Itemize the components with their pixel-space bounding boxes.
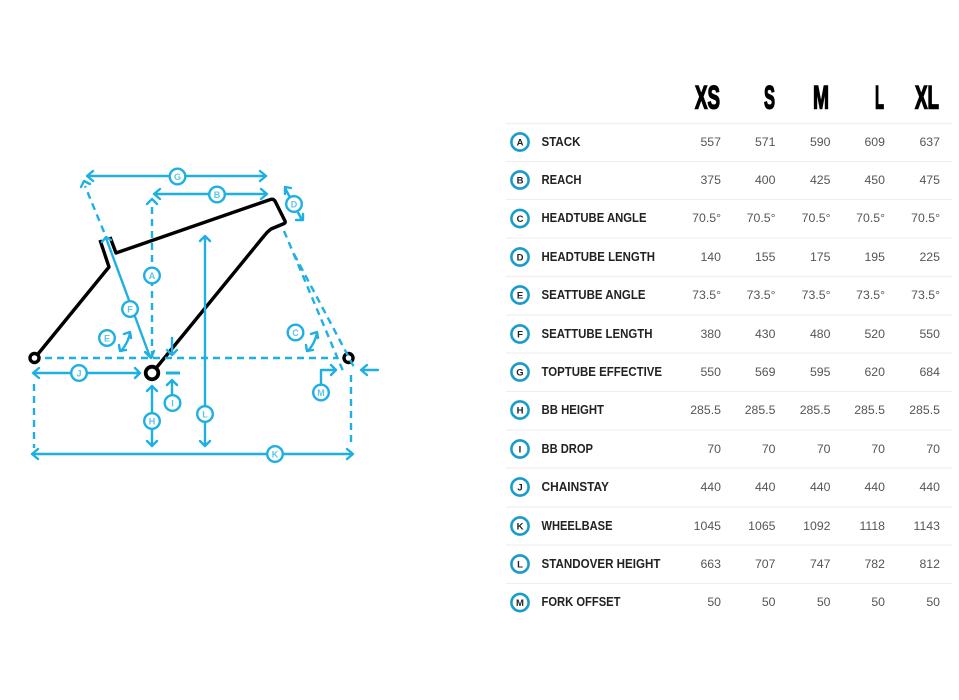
row: seattube angle: 73.5° [802,288,831,302]
row: headtube angle: C [517,214,524,225]
dimension B: reach [154,187,267,202]
row: standover height: 707 [755,557,776,571]
row: BB drop [511,440,940,458]
dimension M: fork offset [313,365,378,400]
row: reach: B [517,176,524,186]
row: stack: STACK [542,135,580,149]
row: BB drop: 70 [817,442,831,456]
row: seattube length: 480 [810,327,831,341]
dimension A: stack [144,199,160,283]
dimension D: headtube length: D [291,200,298,210]
row: seattube length [511,325,940,343]
row: chainstay: 440 [864,480,885,494]
dimension L: standover height [197,236,213,446]
row: fork offset: 50 [871,595,885,609]
row: reach: 475 [919,173,940,187]
dimension G: toptube effective: G [174,172,181,182]
row: headtube length [511,248,940,266]
row: standover height: L [517,560,523,570]
row: headtube length: 155 [755,250,776,264]
row: stack: 590 [810,135,831,149]
dimension I: BB drop [165,338,180,411]
row: chainstay: 440 [919,480,940,494]
row: BB height: H [517,406,524,416]
row: BB height: 285.5 [800,403,831,417]
row: seattube angle: 73.5° [911,288,940,302]
row: reach: 400 [755,173,776,187]
dimension F: seattube length [81,181,154,358]
dimension C: headtube angle: C [292,328,299,338]
size headers [695,80,939,116]
frame outline [30,199,353,379]
row: reach: 450 [864,173,885,187]
row: chainstay: 440 [810,480,831,494]
row: BB drop: 70 [707,442,721,456]
dimension I: BB drop: I [171,398,174,408]
row: chainstay: CHAINSTAY [542,480,610,494]
row: headtube angle: 70.5° [692,211,721,225]
dimension E: seattube angle: E [104,334,110,344]
row: reach: 425 [810,173,831,187]
row: seattube length: 430 [755,327,776,341]
geometry table [506,80,952,611]
size headers: L [875,80,884,116]
row: toptube effective: TOPTUBE EFFECTIVE [542,365,662,379]
row: BB drop: I [519,444,521,456]
row: toptube effective [511,363,940,381]
dimension J: chainstay: J [76,368,82,378]
table row rules [506,124,952,584]
row: chainstay [511,478,940,496]
row: toptube effective: 550 [700,365,721,379]
dimension H: BB height [144,386,160,446]
row: toptube effective: 595 [810,365,831,379]
row: BB height: 285.5 [854,403,885,417]
row: seattube angle: SEATTUBE ANGLE [542,288,646,302]
row: seattube length: 550 [919,327,940,341]
row: headtube angle: 70.5° [911,211,940,225]
row: reach: 375 [700,173,721,187]
row: seattube length: 380 [700,327,721,341]
row: toptube effective: 684 [919,365,940,379]
row: headtube length: 195 [864,250,885,264]
row: chainstay: 440 [755,480,776,494]
dimension H: BB height: H [149,416,155,426]
row: BB height: 285.5 [909,403,940,417]
row: headtube angle: 70.5° [802,211,831,225]
row: standover height: STANDOVER HEIGHT [542,557,661,571]
row: seattube length: F [517,330,523,340]
row: BB drop: 70 [926,442,940,456]
row: headtube length: 140 [700,250,721,264]
dimension A: stack: A [149,271,156,281]
row: stack [511,133,940,151]
size headers: XS [695,80,720,116]
row: wheelbase: 1065 [748,519,776,533]
row: wheelbase: 1143 [914,519,940,533]
row: headtube angle [511,210,940,227]
dimension K: wheelbase: K [272,450,279,460]
row: wheelbase: K [517,522,524,532]
row: wheelbase: 1092 [803,519,831,533]
size headers: M [813,80,829,116]
row: fork offset [511,594,940,611]
row: seattube angle: E [517,290,523,302]
row: fork offset: FORK OFFSET [542,595,621,609]
dimension B: reach: B [214,190,221,200]
row: BB drop: BB DROP [542,442,593,456]
row: wheelbase [511,517,940,535]
row: fork offset: 50 [817,595,831,609]
row: stack: A [517,138,524,148]
dimension C: headtube angle [288,325,318,351]
row: headtube angle: HEADTUBE ANGLE [542,211,646,225]
row: seattube length: SEATTUBE LENGTH [542,327,652,341]
row: toptube effective: G [516,368,524,378]
dimension D: headtube length [285,187,303,220]
row: seattube angle [511,286,940,304]
row: stack: 637 [919,135,940,149]
row: fork offset: M [516,598,524,609]
row: BB height: 285.5 [690,403,721,417]
row: seattube angle: 73.5° [747,288,776,302]
row: BB height: BB HEIGHT [542,403,604,417]
row: toptube effective: 569 [755,365,776,379]
row: wheelbase: 1118 [859,519,885,533]
dimension K: wheelbase [32,446,353,462]
row: chainstay: J [517,482,523,494]
size headers: S [764,80,775,116]
dimension J: chainstay [33,365,140,381]
row: headtube length: HEADTUBE LENGTH [542,250,655,264]
row: reach: REACH [542,173,582,187]
row: BB drop: 70 [871,442,885,456]
row: headtube length: 175 [810,250,831,264]
row: seattube length: 520 [864,327,885,341]
row: wheelbase: WHEELBASE [542,519,612,533]
dimension M: fork offset: M [317,388,325,398]
size headers: XL [915,80,939,116]
row: fork offset: 50 [926,595,940,609]
row: headtube angle: 70.5° [856,211,885,225]
row: seattube angle: 73.5° [856,288,885,302]
row: toptube effective: 620 [864,365,885,379]
dimension E: seattube angle [99,330,131,351]
row: reach [511,171,940,189]
dimension L: standover height: L [202,410,208,420]
row: BB drop: 70 [762,442,776,456]
row: seattube angle: 73.5° [692,288,721,302]
row: headtube length: 225 [919,250,940,264]
row: wheelbase: 1045 [694,519,721,533]
row: stack: 557 [700,135,721,149]
bike geometry diagram [30,169,378,462]
row: BB height [511,401,940,419]
row: standover height: 663 [700,557,721,571]
row: fork offset: 50 [762,595,776,609]
row: chainstay: 440 [700,480,721,494]
row: headtube length: D [517,252,524,264]
row: standover height: 812 [919,557,940,571]
row: fork offset: 50 [707,595,721,609]
row: BB height: 285.5 [745,403,776,417]
dimension F: seattube length: F [127,304,133,314]
row: stack: 571 [755,135,776,149]
dimension G: toptube effective [87,169,266,184]
row: standover height: 747 [810,557,831,571]
dashed reference lines [34,186,355,448]
row: standover height [511,555,940,573]
row: headtube angle: 70.5° [747,211,776,225]
row: stack: 609 [864,135,885,149]
row: standover height: 782 [864,557,885,571]
